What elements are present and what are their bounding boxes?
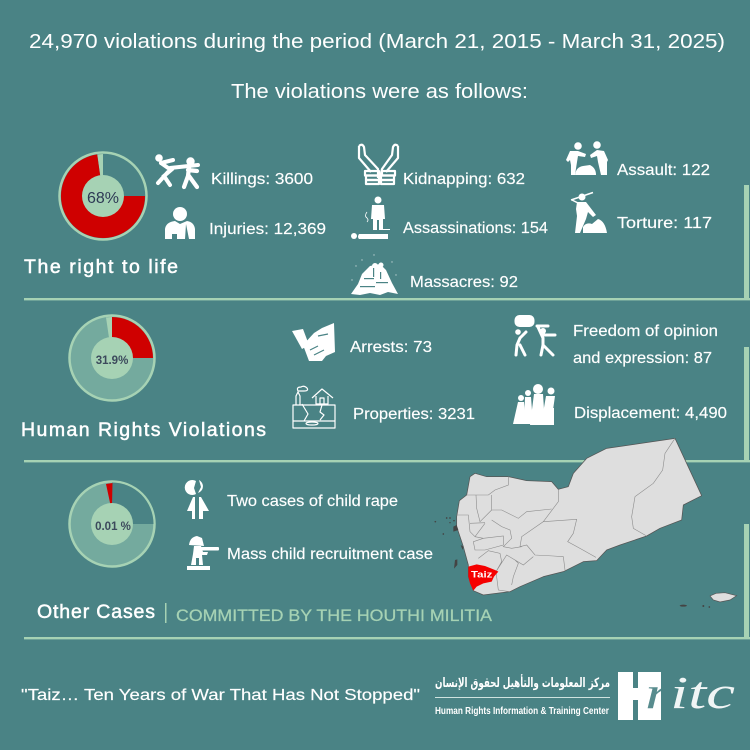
label: assassinations: Assassinations: 154 [403,220,548,237]
label: committed by the Houthi militia: COMMITTED BY THE HOUTHI MILITIA [176,606,493,625]
icon: displacement [513,384,555,425]
heading: human rights violations: Human Rights Violations [21,419,266,441]
label: child recruitment: Mass child recruitment case [227,546,433,563]
logo: HRITC [435,667,735,720]
pie chart: human rights violations 31.9%: 31.9% [96,355,128,367]
icon: child rape [185,480,209,519]
region: Taiz [468,564,498,591]
pie chart: right to life 68% [60,152,146,240]
icon: killings [155,154,198,187]
pie chart: other cases 0.01%: 0.01 % [95,521,131,533]
label: and expression: and expression: 87 [573,350,712,367]
label: properties: Properties: 3231 [353,406,475,423]
label: displacement: Displacement: 4,490 [574,405,727,422]
pie chart: other cases 0.01% [70,482,154,566]
label: massacres: Massacres: 92 [410,274,518,291]
label: kidnapping: Kidnapping: 632 [403,171,525,188]
icon: massacres pile [351,254,398,295]
heading: other cases: Other Cases [37,601,155,623]
heading: the right to life: The right to life [24,256,178,278]
label: child rape: Two cases of child rape [227,493,398,510]
icon: properties damaged house [293,386,335,428]
pie chart: human rights violations 31.9% [70,316,154,400]
label: freedom of opinion: Freedom of opinion [573,323,718,340]
subtitle: The violations were as follows: [231,81,528,103]
label: assault: Assault: 122 [617,162,710,179]
icon: assassinations [351,196,390,239]
logo script letters: ritc [645,667,735,718]
label: injuries: Injuries: 12,369 [209,221,326,238]
logo arabic name: مركز المعلومات والتأهيل لحقوق الإنسان [435,674,610,691]
icon: child recruitment soldier [187,536,219,570]
icon: arrests handcuffed hands [292,323,335,361]
label: torture: Torture: 117 [617,215,712,232]
label: killings: Killings: 3600 [211,171,313,188]
map: Yemen governorates with Taiz highlighted [434,438,737,608]
logo english name: Human Rights Information & Training Center [435,706,609,717]
title: 24,970 violations during the period (March 21, 2015 - March 31, 2025) [29,31,725,53]
label: arrests: Arrests: 73 [350,339,432,356]
icon: kidnapping hands [359,145,398,184]
quote: "Taiz… Ten Years of War That Has Not Stopped" [21,687,420,704]
logo mark H [618,672,661,720]
icon: torture [571,192,607,233]
icon: assault [566,141,608,175]
icon: injuries [165,207,195,239]
label: Taiz: Taiz [471,569,493,579]
island: Socotra [710,593,737,602]
icon: freedom of opinion [514,315,555,355]
pie chart: right to life 68%: 68% [87,190,119,207]
